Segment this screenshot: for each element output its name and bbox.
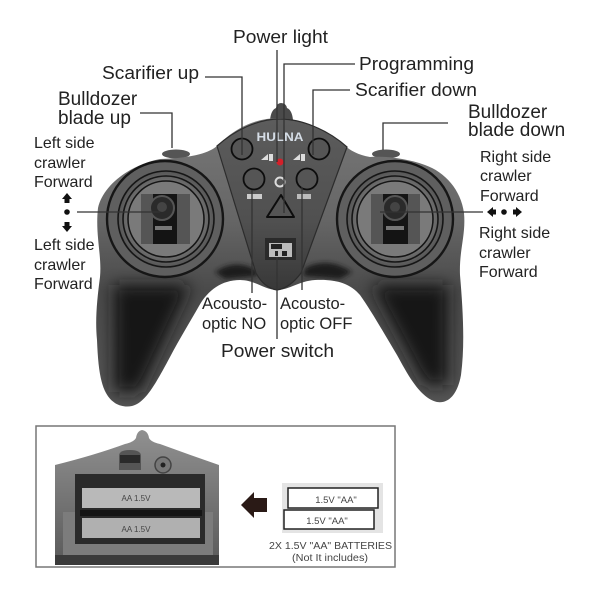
- infographic canvas: [34, 30, 564, 568]
- joystick stick: [383, 196, 407, 220]
- inner grip shadows: [215, 263, 352, 279]
- label: programming: Programming: [359, 54, 474, 74]
- upper battery slot: [82, 488, 200, 508]
- icon: right stick direction arrows: [487, 207, 522, 217]
- label: left side crawler forward upper: Forward: [34, 174, 93, 191]
- label: right side crawler forward lower: crawler: [479, 245, 531, 262]
- label: acousto-optic off: optic OFF: [280, 315, 352, 333]
- label: bulldozer blade up: Bulldozer: [58, 89, 138, 110]
- scarifier down button: [308, 138, 330, 160]
- label: left side crawler forward lower: Left side: [34, 237, 95, 254]
- label: right side crawler forward upper: Right side: [480, 149, 551, 166]
- label: scarifier up: Scarifier up: [102, 63, 199, 83]
- joystick stick: [150, 196, 174, 220]
- lower slot marking: AA 1.5V: [122, 525, 151, 534]
- top battery text: 1.5V "AA": [315, 495, 357, 506]
- icon: left stick direction arrows: [62, 193, 72, 232]
- label: power switch: Power switch: [221, 341, 334, 361]
- lower battery slot: [82, 518, 200, 538]
- label: bulldozer blade up: blade up: [58, 108, 131, 129]
- controller: [96, 103, 464, 406]
- acousto-optic off button: [296, 168, 318, 190]
- bulldozer shoulder buttons: [162, 150, 400, 158]
- label: left side crawler forward lower: crawler: [34, 257, 86, 274]
- acousto-optic on button: [244, 168, 264, 190]
- brand logo: HULNA: [256, 132, 304, 144]
- leader lines: [77, 50, 483, 339]
- scarifier up button: [232, 138, 252, 160]
- right joystick pad: [337, 161, 453, 277]
- sound and light icons: [247, 178, 311, 199]
- slot divider: [80, 510, 202, 516]
- battery caption: (Not It includes): [292, 553, 368, 564]
- trim icons: [261, 154, 305, 161]
- label: right side crawler forward upper: Forward: [480, 188, 539, 205]
- label: acousto-optic off: Acousto-: [280, 295, 345, 313]
- label: bulldozer blade down: blade down: [468, 120, 565, 141]
- battery illustration: [282, 483, 383, 533]
- battery compartment photo: [55, 430, 219, 565]
- inset frame: [36, 426, 395, 567]
- label: left side crawler forward lower: Forward: [34, 276, 93, 293]
- joystick gate: [141, 194, 190, 244]
- label: acousto-optic no: Acousto-: [202, 295, 267, 313]
- label: scarifier down: Scarifier down: [355, 80, 477, 100]
- panel: battery compartment inset: [36, 426, 395, 567]
- left joystick pad: [107, 161, 223, 277]
- programming indicator light: [276, 158, 284, 166]
- grip shading: [114, 285, 448, 392]
- top antenna nub: [270, 103, 293, 120]
- label: bulldozer blade down: Bulldozer: [468, 102, 548, 123]
- label: right side crawler forward upper: crawler: [480, 168, 532, 185]
- label: acousto-optic no: optic NO: [202, 315, 266, 333]
- upper slot marking: AA 1.5V: [122, 494, 151, 503]
- controller body: [96, 118, 464, 406]
- label: right side crawler forward lower: Right side: [479, 225, 550, 242]
- label: left side crawler forward upper: crawler: [34, 155, 86, 172]
- label: right side crawler forward lower: Forward: [479, 264, 538, 281]
- label: left side crawler forward upper: Left side: [34, 135, 95, 152]
- bottom battery text: 1.5V "AA": [306, 516, 348, 527]
- power switch: [265, 238, 296, 260]
- label: power light: Power light: [233, 27, 328, 47]
- programming triangle button: [267, 195, 294, 217]
- arrow pointing to compartment: [241, 492, 267, 518]
- battery caption: 2X 1.5V "AA" BATTERIES: [269, 541, 392, 552]
- centre control panel: [217, 119, 347, 290]
- joystick gate: [371, 194, 420, 244]
